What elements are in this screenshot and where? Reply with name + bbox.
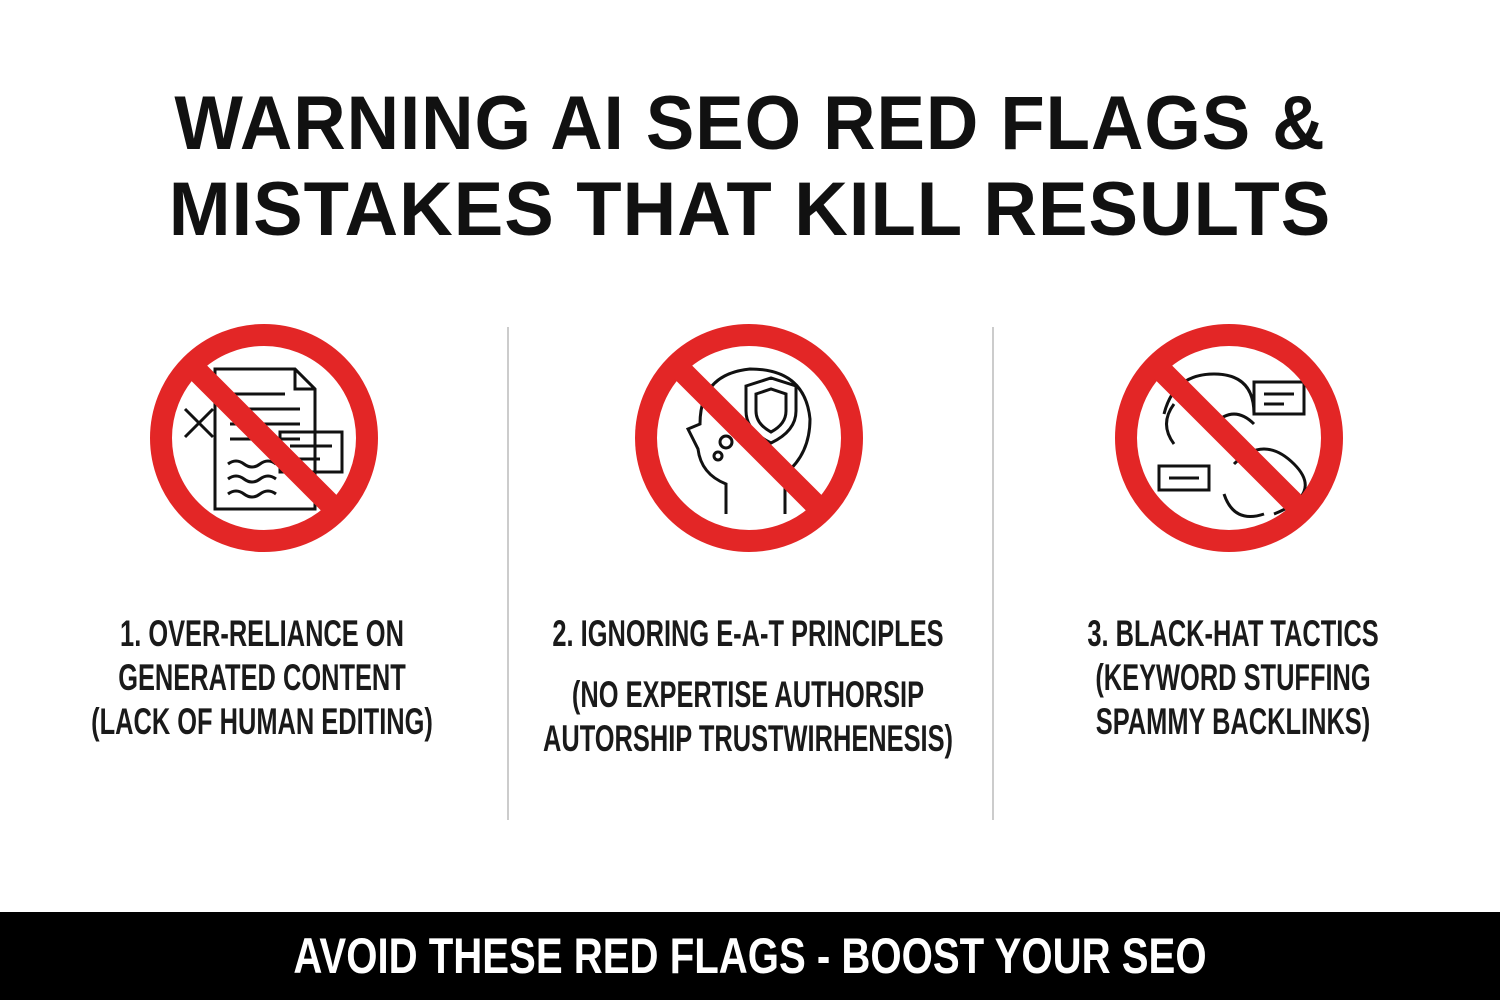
caption 1: GENERATED CONTENT [118, 657, 406, 698]
caption 3: SPAMMY BACKLINKS) [1096, 701, 1370, 742]
title: MISTAKES THAT KILL RESULTS [169, 167, 1331, 252]
footer bar [0, 912, 1500, 1000]
icon: black hat tactics [1115, 324, 1343, 552]
caption 2: AUTORSHIP TRUSTWIRHENESIS) [543, 718, 953, 759]
title [169, 81, 1331, 252]
title: WARNING AI SEO RED FLAGS & [174, 81, 1326, 166]
caption 2 [543, 613, 953, 759]
caption 3 [1087, 613, 1379, 742]
caption 3: (KEYWORD STUFFING [1095, 657, 1371, 698]
caption 2: 2. IGNORING E-A-T PRINCIPLES (NO EXPERTISE AUTHORSIP [552, 613, 944, 715]
icon: head shield [635, 324, 863, 552]
caption 3: 3. BLACK-HAT TACTICS [1087, 613, 1379, 654]
caption 1: 1. OVER-RELIANCE ON [120, 613, 404, 654]
caption 1 [91, 613, 433, 742]
caption 1: (LACK OF HUMAN EDITING) [91, 701, 433, 742]
icon: no generated content [150, 324, 378, 552]
footer bar: AVOID THESE RED FLAGS - BOOST YOUR SEO [293, 928, 1207, 984]
